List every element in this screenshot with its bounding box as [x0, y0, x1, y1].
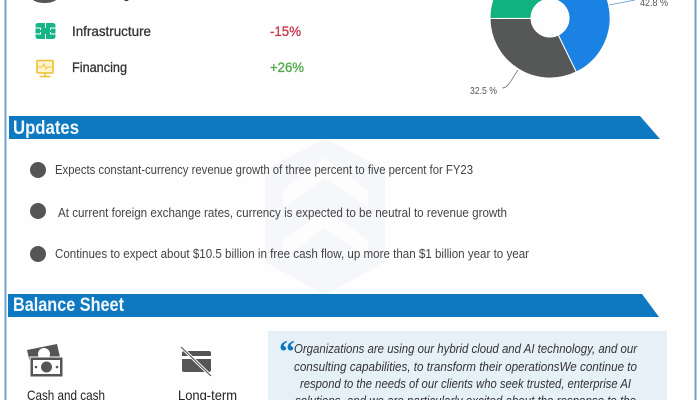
heading: balance sheet [8, 294, 659, 317]
quote text: consulting capabilities, to transform their operationsWe continue to [294, 359, 637, 374]
segment row: infrastructure [36, 23, 301, 39]
metric: long-term debt [178, 347, 237, 400]
change: infrastructure: -15% [270, 23, 301, 39]
segment row: consulting [32, 0, 130, 3]
icon: monitor [37, 60, 53, 76]
slice: green [490, 0, 550, 18]
segment row: financing [37, 59, 304, 76]
segment name: infrastructure: Infrastructure [72, 24, 151, 39]
metric: cash and cash equivalents [27, 344, 105, 400]
icon: banknotes [27, 344, 63, 377]
update 2: At current foreign exchange rates, currency is expected to be neutral to revenue growth [58, 205, 507, 220]
heading: updates [9, 116, 660, 139]
quote mark: “ [279, 333, 295, 369]
label: 32.5 % [470, 70, 518, 97]
slice: blue 42.8% [550, 0, 610, 72]
label: 42.8 % [609, 0, 668, 9]
quote text: Organizations are using our hybrid cloud and AI technology, and our [294, 341, 638, 356]
update list [30, 162, 530, 262]
label: 32.5 %: 32.5 % [470, 85, 497, 97]
heading: balance sheet: Balance Sheet [13, 294, 124, 316]
quote text [294, 341, 638, 400]
change: financing: +26% [270, 59, 304, 75]
icon: database [32, 0, 57, 3]
update 3: Continues to expect about $10.5 billion in free cash flow, up more than $1 billion year to year [55, 246, 530, 261]
update 1: Expects constant-currency revenue growth of three percent to five percent for FY23 [55, 162, 473, 177]
quote panel [268, 331, 667, 400]
donut chart: revenue mix [470, 0, 668, 97]
heading: updates: Updates [13, 117, 79, 139]
slice: gray 32.5% [490, 18, 576, 78]
icon: crossed-out card [181, 347, 211, 376]
segment name: financing: Financing [72, 60, 127, 75]
icon: chip [36, 23, 56, 39]
watermark logo [265, 138, 385, 295]
quote text: respond to the needs of our clients who seek trusted, enterprise AI [300, 376, 631, 391]
